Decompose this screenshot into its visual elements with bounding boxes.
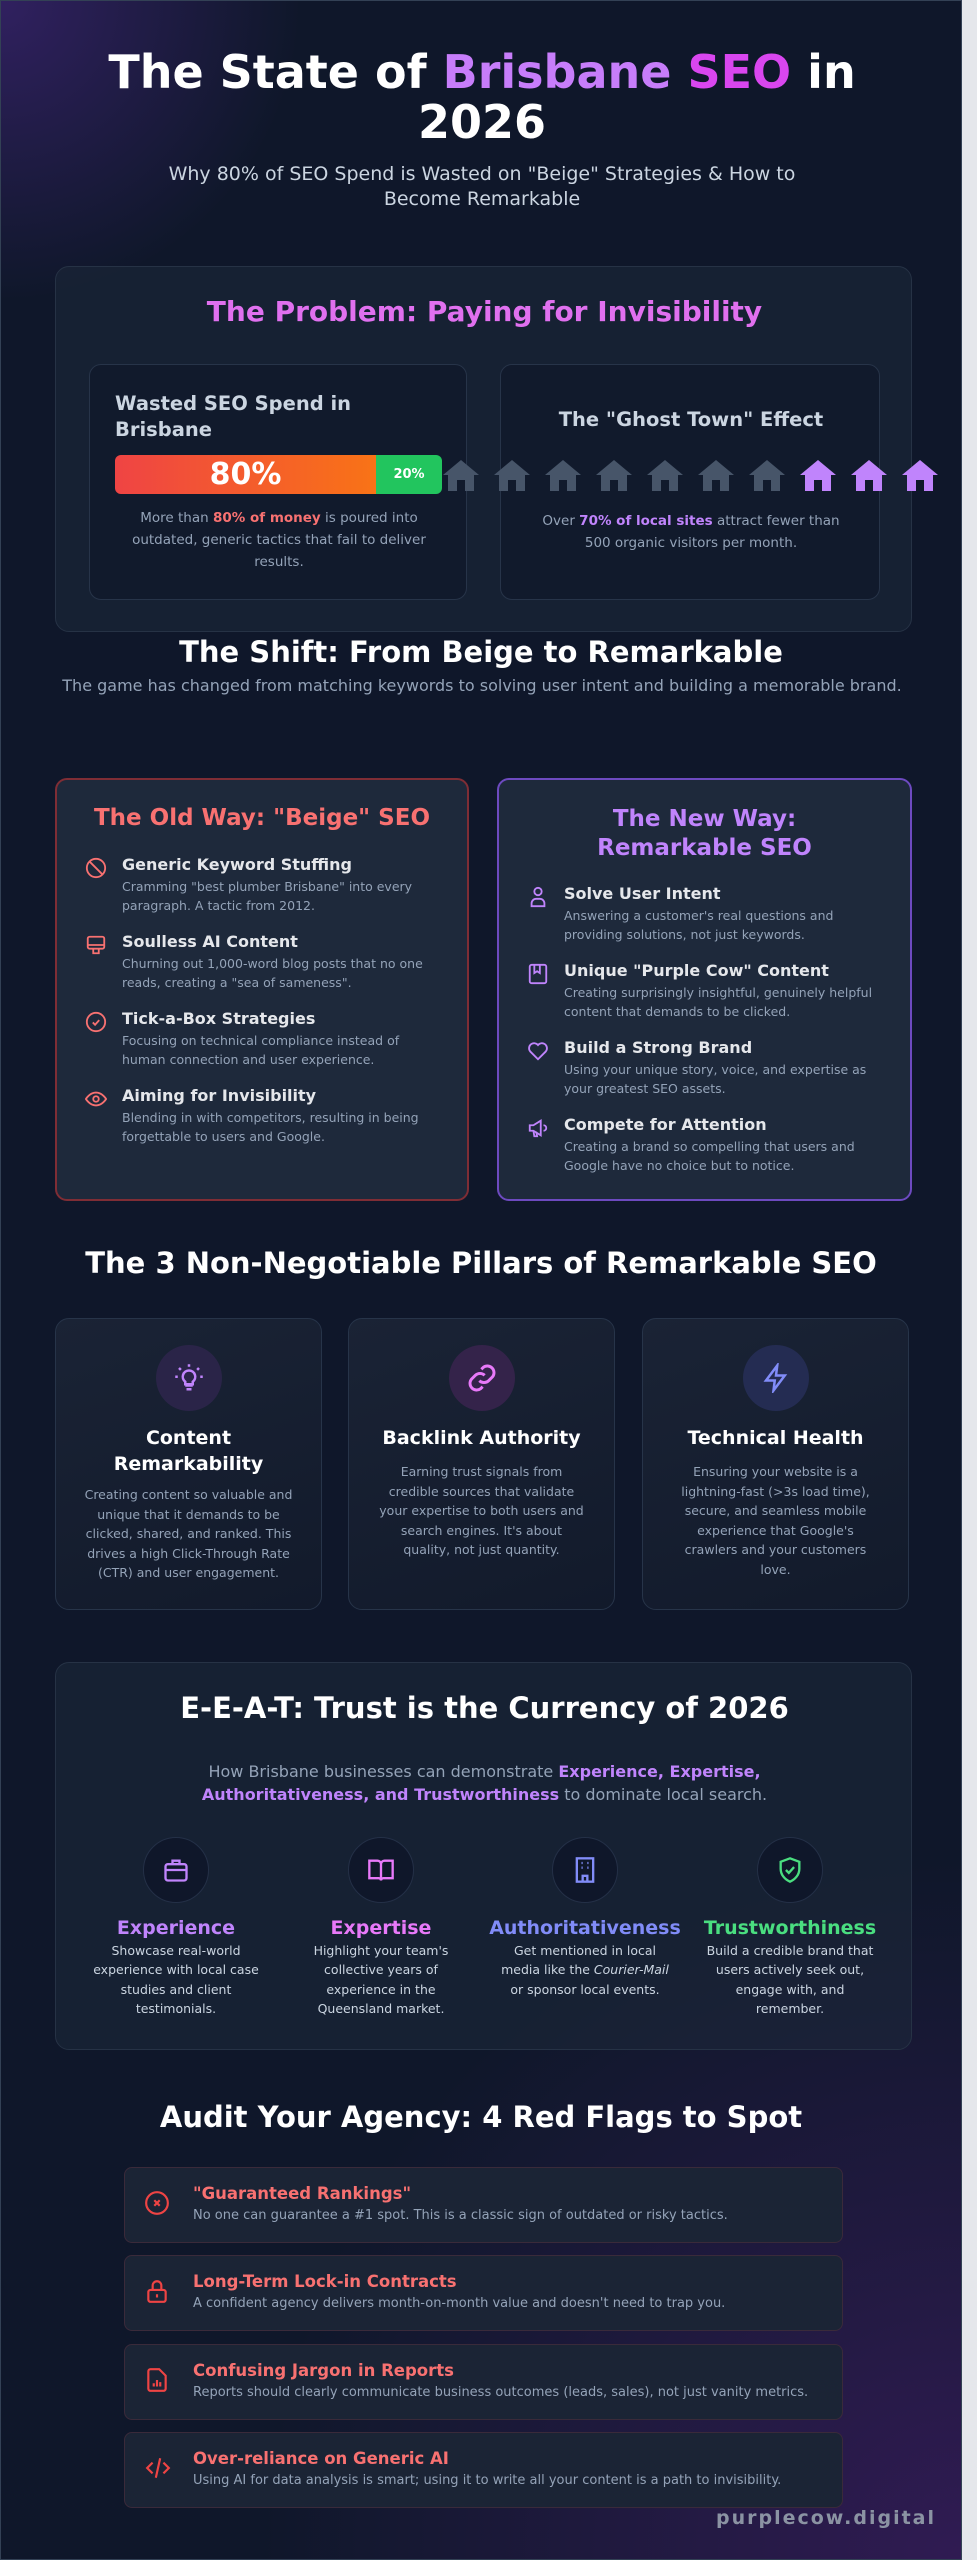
pillar: technical <box>642 1318 909 1610</box>
card: wasted spend <box>89 364 467 600</box>
audit heading: Audit Your Agency: 4 Red Flags to Spot <box>160 2100 802 2134</box>
item: soulless ai: Churning out 1,000-word blog posts that no one reads, creating a "sea of sameness". <box>122 956 423 990</box>
pillar: technical: secure, and seamless mobile <box>685 1503 866 1518</box>
problem heading: The Problem: Paying for Invisibility <box>207 295 762 328</box>
panel: old way <box>55 778 469 1201</box>
eeat: trustworthiness <box>704 1837 876 2016</box>
eeat: authoritativeness: Get mentioned in local <box>514 1943 656 1958</box>
pillar: backlink: quality, not just quantity. <box>403 1542 560 1557</box>
title: The State of Brisbane SEO in <box>108 45 856 99</box>
item: keyword stuffing: Generic Keyword Stuffing <box>122 855 352 874</box>
bar chart 80/20 <box>115 455 442 494</box>
flag: guaranteed rankings <box>124 2167 843 2243</box>
footer brand: purplecow.digital <box>716 2507 936 2529</box>
eeat: authoritativeness: or sponsor local events. <box>510 1982 660 1997</box>
pillar: content: Content <box>146 1427 231 1449</box>
flag: generic ai: Over-reliance on Generic AI <box>193 2449 449 2468</box>
item: purple cow: Creating surprisingly insightful, genuinely helpful content that demands to be clicked. <box>564 985 872 1019</box>
eeat: trustworthiness: Trustworthiness <box>704 1917 876 1939</box>
item: user intent: Solve User Intent <box>564 884 721 903</box>
eeat: authoritativeness <box>489 1837 681 1997</box>
eeat: expertise: Highlight your team's <box>314 1943 448 1958</box>
eeat: experience: Experience <box>117 1917 235 1939</box>
flag: lock-in: Long-Term Lock-in Contracts <box>193 2272 457 2291</box>
item: user intent <box>530 884 833 942</box>
new items <box>528 884 872 1173</box>
eeat: trustworthiness: Build a credible brand that <box>707 1943 873 1958</box>
eeat: authoritativeness: media like the Courier-Mail <box>501 1962 669 1977</box>
icon: bulb <box>156 1345 222 1411</box>
eeat: trustworthiness: engage with, and <box>736 1982 844 1997</box>
eeat: expertise <box>314 1837 448 2016</box>
pillar: backlink: search engines. It's about <box>401 1522 562 1538</box>
card title: Wasted SEO Spend in Brisbane <box>115 392 351 441</box>
subtitle <box>169 163 795 210</box>
new way heading <box>597 806 812 861</box>
shift heading: The Shift: From Beige to Remarkable <box>179 635 783 669</box>
item: brand: Build a Strong Brand <box>564 1038 752 1057</box>
eeat: experience: studies and client <box>121 1982 231 1997</box>
subtitle: Why 80% of SEO Spend is Wasted on "Beige" Strategies & How to <box>169 163 795 185</box>
shift subtitle: The game has changed from matching keywords to solving user intent and building a memorable brand. <box>62 676 902 695</box>
card title: The "Ghost Town" Effect <box>559 408 823 431</box>
pillar: technical: Ensuring your website is a <box>693 1464 858 1479</box>
pillar: technical: love. <box>760 1562 791 1576</box>
pillar: content <box>55 1318 322 1610</box>
flag: jargon: Reports should clearly communicate business outcomes (leads, sales), not just vanity metrics. <box>193 2385 808 2400</box>
flag: jargon: Confusing Jargon in Reports <box>193 2361 454 2380</box>
pillar: backlink: credible sources that validate <box>389 1484 574 1498</box>
item: tick-a-box <box>86 1009 400 1067</box>
pillar: content: Remarkability <box>114 1453 263 1475</box>
card text: More than 80% of money is poured into outdated, generic tactics that fail to deliver results. <box>132 510 426 570</box>
eeat: trustworthiness: users actively seek out, <box>716 1962 864 1977</box>
bar chart 80/20: 80% <box>210 457 281 492</box>
eeat: expertise: Queensland market. <box>318 2001 444 2016</box>
item: tick-a-box: Focusing on technical compliance instead of human connection and user experience. <box>122 1033 399 1067</box>
icon: bolt <box>743 1345 809 1411</box>
pillar: technical: lightning-fast (>3s load time), <box>681 1484 870 1498</box>
title <box>108 45 856 149</box>
panel: EEAT <box>55 1662 912 2050</box>
item: attention: Compete for Attention <box>564 1115 767 1134</box>
flag: generic ai: Using AI for data analysis is smart; using it to write all your content is a path to invisibility. <box>193 2473 781 2488</box>
EEAT heading: E-E-A-T: Trust is the Currency of 2026 <box>180 1691 789 1725</box>
pillar: backlink: Earning trust signals from <box>401 1464 562 1479</box>
item: keyword stuffing <box>86 855 412 913</box>
eeat: experience: testimonials. <box>136 2001 216 2016</box>
pillar: technical: Technical Health <box>687 1427 864 1449</box>
bar chart 80/20: 20% <box>393 467 425 482</box>
flag: guaranteed rankings: No one can guarantee a #1 spot. This is a classic sign of outdated or risky tactics. <box>193 2208 728 2223</box>
panel: new way <box>497 778 912 1201</box>
flag: lock-in: A confident agency delivers month-on-month value and doesn't need to trap you. <box>193 2296 725 2311</box>
item: invisibility <box>85 1086 419 1144</box>
pillar: technical: crawlers and your customers <box>685 1542 866 1557</box>
item: attention <box>528 1115 855 1173</box>
flag: generic ai <box>124 2432 843 2508</box>
card text <box>542 513 840 551</box>
flag: lock-in <box>124 2255 843 2331</box>
panel: problem <box>55 266 912 632</box>
card text: Over 70% of local sites attract fewer than <box>542 513 840 529</box>
flag: guaranteed rankings: "Guaranteed Rankings" <box>193 2184 411 2203</box>
pillars heading: The 3 Non-Negotiable Pillars of Remarkable SEO <box>85 1246 877 1280</box>
item: brand <box>528 1038 866 1096</box>
item: attention: Creating a brand so compelling that users and Google have no choice but to notice. <box>564 1139 855 1173</box>
item: user intent: Answering a customer's real questions and providing solutions, not just keywords. <box>564 908 833 942</box>
pillar: backlink: your expertise to both users and <box>379 1503 584 1518</box>
pillar: technical: experience that Google's <box>697 1522 854 1538</box>
item: soulless ai: Soulless AI Content <box>122 932 298 951</box>
subtitle: Become Remarkable <box>384 188 580 210</box>
pillar: backlink <box>348 1318 615 1610</box>
icon: link <box>449 1345 515 1411</box>
eeat: expertise: collective years of <box>324 1962 438 1977</box>
flag: jargon <box>124 2344 843 2420</box>
item: purple cow <box>528 961 872 1019</box>
pillar: backlink: Backlink Authority <box>382 1427 581 1449</box>
new way heading: Remarkable SEO <box>597 835 812 861</box>
item: keyword stuffing: Cramming "best plumber Brisbane" into every paragraph. A tactic from 2012. <box>122 879 412 913</box>
eeat: experience: experience with local case <box>93 1962 259 1977</box>
item: soulless ai <box>86 932 423 990</box>
eeat: experience: Showcase real-world <box>111 1943 241 1958</box>
item: tick-a-box: Tick-a-Box Strategies <box>122 1009 315 1028</box>
EEAT intro: How Brisbane businesses can demonstrate Experience, Expertise, Authoritativeness, and Trustworthiness to dominate local search. <box>202 1762 767 1804</box>
new way heading: The New Way: <box>613 806 796 832</box>
eeat: trustworthiness: remember. <box>756 2001 824 2016</box>
eeat: expertise: Expertise <box>331 1917 431 1939</box>
card: ghost town <box>500 364 880 600</box>
item: invisibility: Blending in with competitors, resulting in being forgettable to users and Google. <box>122 1110 419 1144</box>
pillar: content: Creating content so valuable and unique that it demands to be clicked, shared, and ranked. This drives a high Click-Through Rate (CTR) and user engagement. <box>85 1487 292 1580</box>
eeat: authoritativeness: Authoritativeness <box>489 1917 681 1939</box>
item: purple cow: Unique "Purple Cow" Content <box>564 961 829 980</box>
old items <box>85 855 423 1144</box>
eeat: expertise: experience in the <box>326 1982 436 1997</box>
item: brand: Using your unique story, voice, and expertise as your greatest SEO assets. <box>564 1062 866 1096</box>
card text: 500 organic visitors per month. <box>585 535 797 551</box>
eeat: experience <box>93 1837 259 2016</box>
item: invisibility: Aiming for Invisibility <box>122 1086 316 1105</box>
icon row: houses <box>443 460 938 491</box>
title: 2026 <box>418 95 546 149</box>
old way heading: The Old Way: "Beige" SEO <box>94 805 430 831</box>
